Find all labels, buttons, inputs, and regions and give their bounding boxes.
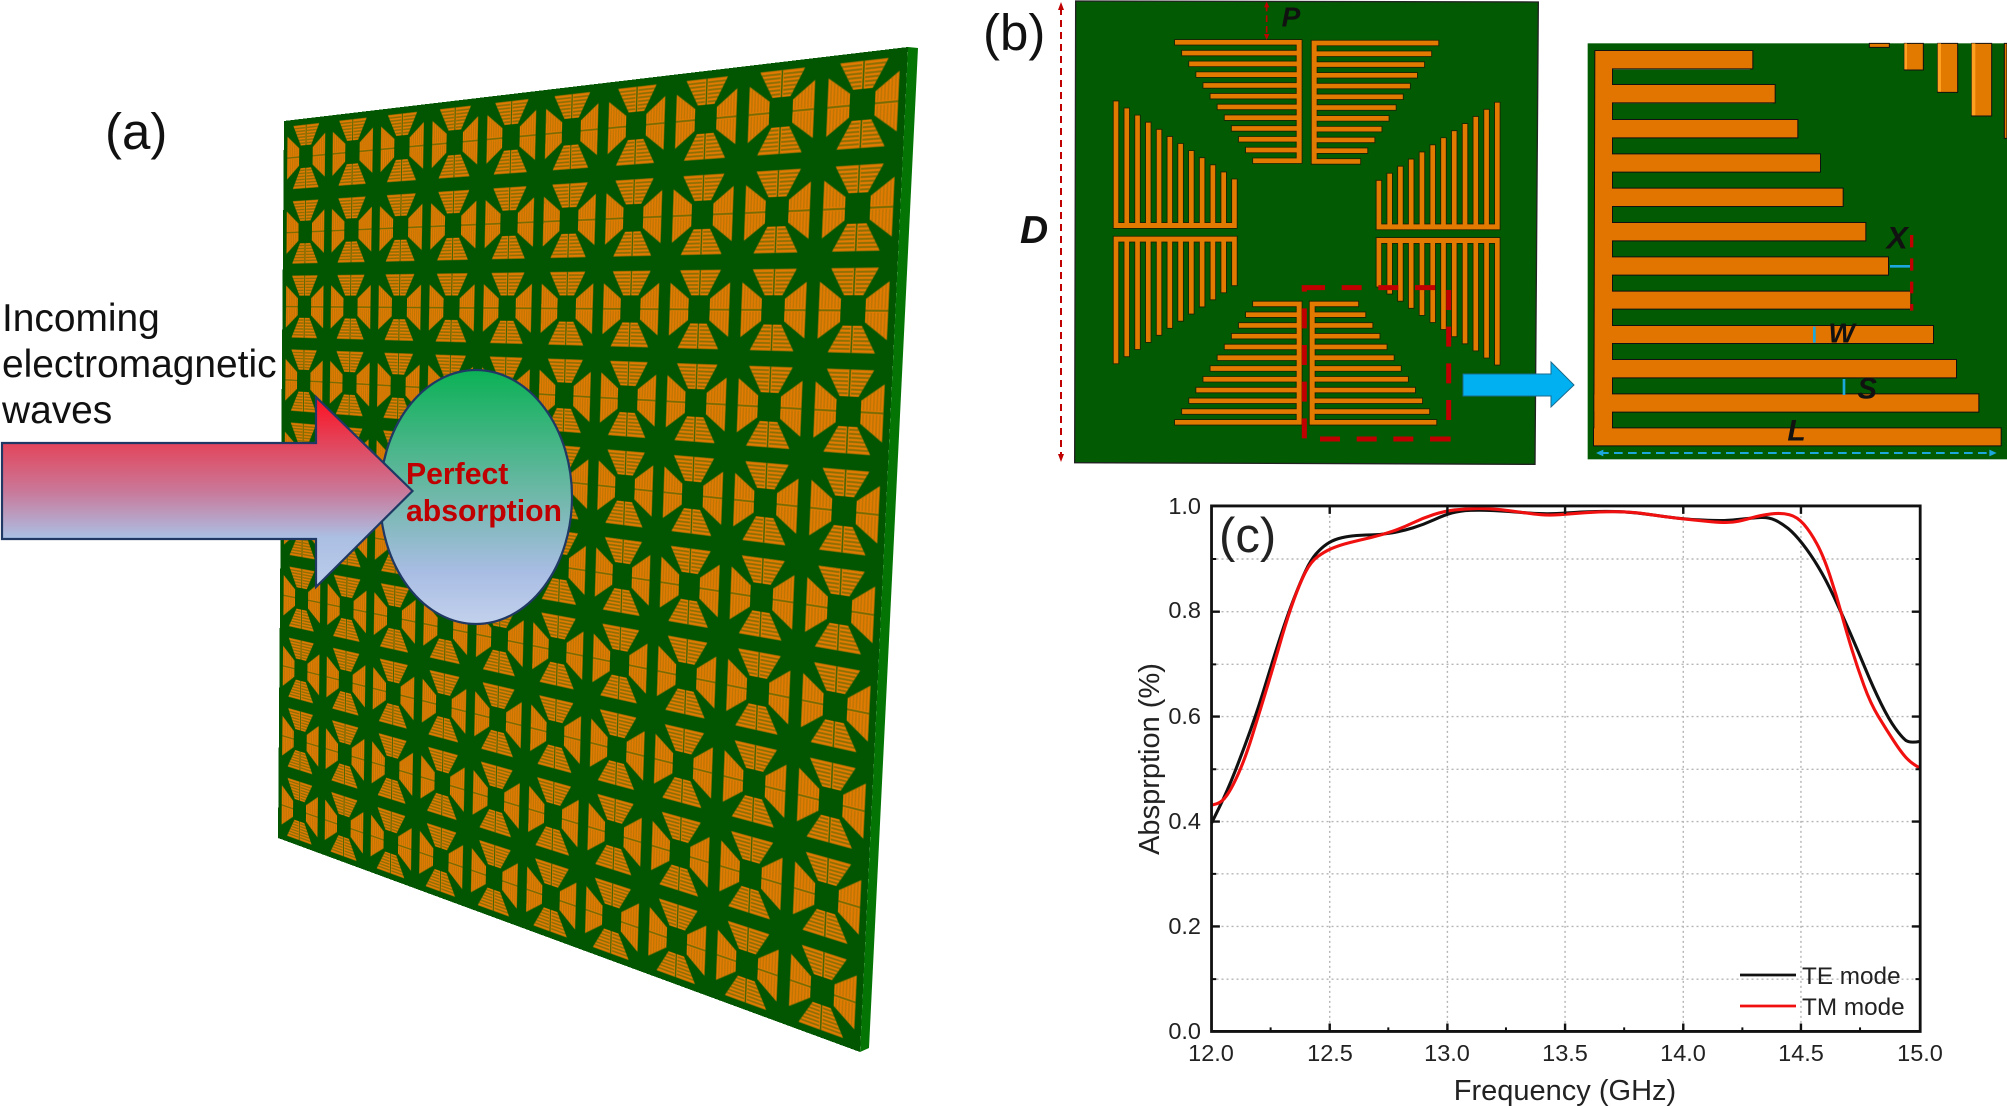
dimension W	[1814, 318, 1857, 349]
comb resonators	[1114, 40, 1500, 425]
grid lines	[1212, 506, 1920, 1031]
dimension S: S	[1857, 372, 1877, 405]
dashed zoom box	[1302, 287, 1451, 439]
text: perfect absorption	[406, 458, 562, 528]
x-axis tick labels: 14.0	[1660, 1040, 1706, 1066]
x-axis tick labels: 12.5	[1307, 1040, 1353, 1066]
TE curve	[1212, 510, 1920, 823]
plot area with grid, curves and frame	[1212, 506, 1920, 1031]
arrow: blue zoom-in arrow	[1463, 362, 1574, 407]
y-axis tick labels: 0.8	[1168, 597, 1201, 623]
dimension W: W	[1828, 318, 1857, 349]
finger shadows	[1613, 69, 1818, 172]
dimension L	[1596, 415, 1997, 456]
ellipse: perfect absorption region	[380, 370, 572, 624]
x-axis tick labels: 12.0	[1188, 1040, 1234, 1066]
label (b): (b)	[983, 4, 1045, 61]
legend	[1740, 963, 1905, 1021]
label (c): (c)	[1219, 509, 1276, 563]
y-axis tick labels: 0.2	[1168, 913, 1201, 939]
frame and ticks	[1212, 506, 1920, 1031]
text: perfect absorption: Perfect	[406, 458, 508, 491]
dimension X	[1885, 219, 1912, 311]
text: perfect absorption: absorption	[406, 495, 562, 528]
x-axis tick labels	[1188, 1040, 1943, 1066]
dimension arrow D	[1020, 2, 1064, 462]
legend: TE mode	[1802, 963, 1901, 990]
x-axis tick labels: 14.5	[1778, 1040, 1824, 1066]
text: incoming electromagnetic waves: Incoming	[2, 297, 160, 340]
text: incoming electromagnetic waves: waves	[1, 389, 112, 432]
dimension P	[1264, 1, 1301, 40]
dimension L: L	[1787, 415, 1806, 448]
dimension X: X	[1885, 219, 1910, 255]
dimension arrow D: D	[1020, 209, 1048, 252]
arrow: incoming wave	[2, 397, 412, 587]
comb fingers	[1594, 51, 2001, 445]
plate side face	[860, 47, 918, 1052]
y-axis tick labels: 1.0	[1168, 493, 1201, 519]
dimension S	[1844, 372, 1877, 405]
y-axis tick labels	[1168, 493, 1201, 1044]
label (a): (a)	[105, 103, 167, 160]
x-axis tick labels: 15.0	[1897, 1040, 1943, 1066]
dimension P: P	[1282, 2, 1301, 33]
text: incoming electromagnetic waves: electromagnetic	[2, 343, 277, 386]
panel (b) inset: zoomed comb	[1588, 43, 2007, 459]
x-axis tick labels: 13.5	[1542, 1040, 1588, 1066]
panel (c): absorption chart	[1134, 493, 1943, 1106]
panel (b): unit cell top view	[1075, 1, 1538, 464]
y-axis tick labels: 0.0	[1168, 1018, 1201, 1044]
legend: TM mode	[1802, 994, 1905, 1021]
text: incoming electromagnetic waves	[1, 297, 277, 432]
x-axis tick labels: 13.0	[1424, 1040, 1470, 1066]
y-axis tick labels: 0.6	[1168, 703, 1201, 729]
panel (a): metasurface plate with unit-cell array in perspective	[278, 47, 908, 1052]
axis title: absorption: Absprption (%)	[1134, 663, 1166, 855]
y-axis tick labels: 0.4	[1168, 808, 1201, 834]
TM curve	[1212, 508, 1920, 805]
neighbour finger tips	[1869, 43, 2007, 138]
